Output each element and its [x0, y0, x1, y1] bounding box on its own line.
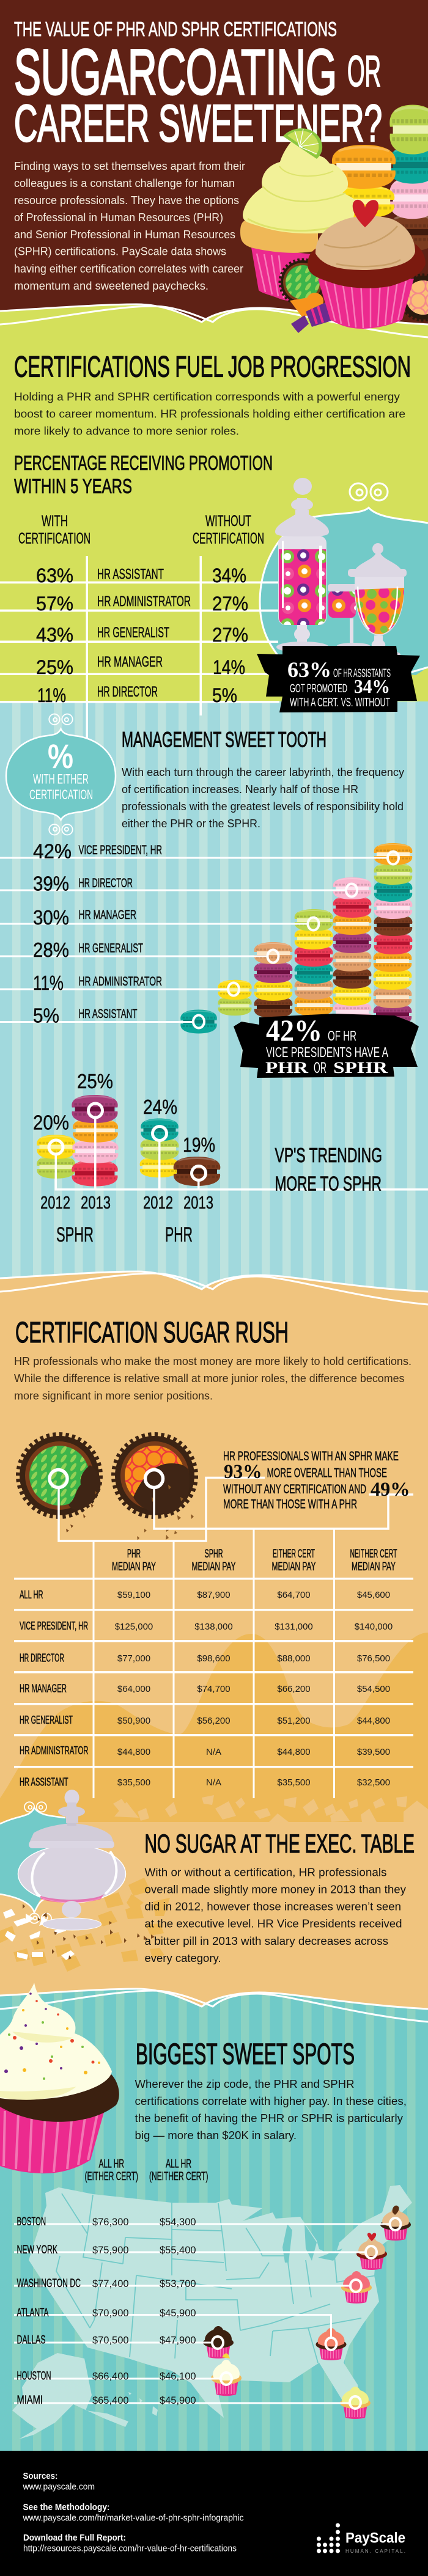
row: manager: [33, 906, 136, 929]
trend axis years: 2012: [143, 1193, 173, 1213]
sugar shards along hill edge: [113, 1795, 428, 1822]
table row: administrator: $44,800: [277, 1747, 311, 1757]
banner: 63 percent callout: GOT PROMOTED: [290, 682, 347, 695]
table row: vice president: $138,000: [194, 1622, 233, 1632]
section background: black footer: [0, 2451, 428, 2576]
connectors from truffles to table: [50, 1470, 413, 1541]
row: HR administrator: 27%: [212, 593, 248, 615]
trend rings: [49, 1103, 205, 1180]
row: director: [33, 873, 133, 895]
table column headers: MEDIAN PAY: [192, 1561, 236, 1573]
illustration: empty candy jar: [18, 1790, 126, 1930]
table grid: promotion rates: [0, 556, 279, 739]
table row: all HR: [20, 1589, 390, 1601]
row: assistant: 5%: [33, 1004, 59, 1026]
column head: without certification: CERTIFICATION: [193, 530, 264, 547]
row: HR director: [37, 684, 237, 706]
row: HR generalist: [36, 624, 248, 646]
table row: director: $77,000: [117, 1653, 150, 1664]
cupcake: Boston: [380, 2206, 411, 2241]
city row: Miami: MIAMI: [17, 2393, 43, 2407]
paragraph: job progression: [14, 391, 405, 437]
column headers: sweet spots: ALL HR: [99, 2158, 124, 2170]
trend values: 25%: [77, 1070, 113, 1092]
heart: [353, 200, 378, 227]
callout: SPHR pay premium: MORE THAN THOSE WITH A PHR: [223, 1497, 357, 1512]
section background: tan sugar rush: [0, 1272, 428, 2011]
cupcake: Washington DC: [341, 2271, 372, 2303]
paragraph: sweet spots: [135, 2078, 407, 2142]
stack SPHR 2012: [37, 1135, 75, 1179]
percent glyph: %: [48, 737, 73, 775]
section background: striped blue management: [0, 701, 428, 1312]
intro paragraph: colleagues is a constant challenge for human: [14, 177, 235, 189]
state lines: [56, 2194, 377, 2363]
truffle green: [281, 260, 325, 304]
row: HR assistant: [36, 565, 246, 587]
row: HR assistant: HR ASSISTANT: [97, 566, 164, 583]
column head: with certification: WITH: [42, 513, 68, 530]
banner: 42 percent callout: OR: [314, 1059, 327, 1077]
banner: 63 percent callout: [257, 646, 420, 712]
column head: with certification: [18, 513, 90, 547]
decorative darker hills behind table: [0, 1633, 428, 1822]
macaron stack: HR assistant: [180, 1010, 217, 1033]
city row: Dallas: $47,900: [160, 2334, 196, 2346]
macaron stack: HR generalist: [254, 942, 292, 1018]
badge: percent with either certification: [6, 714, 116, 835]
paragraph: management: With each turn through the career labyrinth, the frequency: [122, 766, 404, 778]
table row: assistant: $35,500: [117, 1777, 150, 1788]
city row: Washington DC: $77,400: [92, 2278, 128, 2289]
paragraph: exec table: a bitter pill in 2013 with salary decreases across: [144, 1935, 388, 1947]
footer: sources: www.payscale.com: [23, 2482, 95, 2492]
table row: administrator: $39,500: [357, 1747, 390, 1757]
row: vice president: VICE PRESIDENT, HR: [78, 843, 162, 857]
intro paragraph: of Professional in Human Resources (PHR): [14, 211, 223, 224]
paragraph: exec table: overall made slightly more money in 2013 than they: [144, 1883, 406, 1895]
table row: vice president: VICE PRESIDENT, HR: [20, 1620, 88, 1632]
paragraph: sugar rush: more significant in more senior positions.: [14, 1389, 213, 1402]
row: administrator: [33, 971, 162, 994]
row: HR manager: 25%: [36, 656, 73, 678]
cupcake: Houston: [211, 2354, 242, 2396]
row: assistant: [33, 1004, 137, 1026]
badge: percent with either certification: CERTIFICATION: [29, 787, 93, 802]
stack PHR 2013: [174, 1157, 220, 1186]
crumbs: [23, 1904, 155, 1959]
lime slice: [283, 128, 322, 159]
macaron stack: HR director: [333, 877, 371, 1023]
trend values: 20%: [33, 1111, 69, 1134]
table row: manager: $64,000: [117, 1684, 150, 1694]
truffle orange: [401, 276, 428, 320]
title: or: OR: [347, 48, 381, 96]
mini cupcakes on map: [203, 2206, 411, 2419]
intro paragraph: momentum and sweetened paychecks.: [14, 280, 208, 292]
paragraph: exec table: every category.: [144, 1952, 221, 1964]
footer: sources: [23, 2472, 243, 2554]
map rings: [212, 2218, 401, 2409]
column headers: sweet spots: (EITHER CERT): [84, 2170, 138, 2183]
wrapped candy: [290, 293, 331, 333]
row: HR director: 5%: [212, 684, 237, 706]
badge: percent with either certification: WITH EITHER: [33, 771, 89, 787]
trend values: [33, 1070, 215, 1156]
footer: sources: Download the Full Report:: [23, 2533, 126, 2543]
row: HR assistant: 34%: [212, 565, 246, 587]
column headers: sweet spots: (NEITHER CERT): [149, 2170, 208, 2183]
section background: lime job progression: [0, 304, 428, 702]
table column headers: PHR: [127, 1548, 141, 1561]
trend axis years: [40, 1193, 213, 1213]
Hawaii: [128, 2392, 158, 2416]
paragraph: exec table: With or without a certification, HR professionals: [144, 1866, 386, 1878]
paragraph: exec table: [144, 1866, 406, 1964]
city row: Boston: BOSTON: [17, 2215, 46, 2228]
banner: 42 percent callout: OF HR: [328, 1028, 356, 1044]
table column headers: MEDIAN PAY: [352, 1561, 396, 1573]
macaron stack: vice president: [374, 843, 412, 1025]
trend heading: VPs trending more to SPHR: MORE TO SPHR: [275, 1172, 382, 1195]
chocolate cupcake: [308, 200, 426, 329]
banner: 63 percent callout: 34%: [354, 675, 390, 697]
chart lines: share with certification: [0, 857, 387, 1023]
logo: PayScale: HUMAN. CAPITAL.: [345, 2549, 405, 2554]
city row: Washington DC: $53,700: [160, 2278, 196, 2289]
row: assistant: HR ASSISTANT: [78, 1006, 137, 1021]
cupcake: Atlanta: [315, 2328, 346, 2360]
callout: SPHR pay premium: 93%: [224, 1461, 262, 1483]
city row: Boston: $54,300: [160, 2216, 196, 2228]
city row: Atlanta: ATLANTA: [17, 2306, 49, 2319]
table row: vice president: [20, 1620, 393, 1632]
white sugar shards: [3, 1909, 75, 1960]
map of the United States: [12, 2185, 412, 2439]
subheading: percentage receiving promotion: PERCENTAGE RECEIVING PROMOTION: [14, 452, 273, 474]
table row: assistant: [20, 1776, 390, 1788]
table column headers: MEDIAN PAY: [271, 1561, 316, 1573]
great lakes: [282, 2224, 342, 2263]
footer: sources: See the Methodology:: [23, 2503, 110, 2512]
stack SPHR 2013: [72, 1095, 119, 1187]
city row: Atlanta: $70,900: [92, 2307, 128, 2319]
medium jar: [348, 543, 407, 659]
heading: management sweet tooth: MANAGEMENT SWEET TOOTH: [122, 728, 327, 752]
table row: all HR: $59,100: [117, 1590, 150, 1600]
banner: 42 percent callout: PHR: [265, 1059, 308, 1077]
banner: 42 percent callout: [234, 1013, 419, 1078]
row: generalist: HR GENERALIST: [78, 941, 143, 956]
column head: without certification: WITHOUT: [205, 513, 251, 530]
city row: Washington DC: [17, 2277, 196, 2290]
macaron stack middle: [332, 145, 396, 218]
table row: manager: $66,200: [277, 1684, 311, 1694]
illustration: candy jars: [275, 478, 407, 659]
city row: Houston: HOUSTON: [17, 2369, 51, 2383]
paragraph: management: professionals with the greatest levels of responsibility hold: [122, 800, 404, 813]
table column headers: EITHER CERT: [273, 1548, 315, 1561]
table row: generalist: [20, 1714, 390, 1726]
trend values: 24%: [143, 1096, 177, 1118]
column headers: sweet spots: ALL HR: [166, 2158, 191, 2170]
table row: director: $98,600: [197, 1653, 231, 1664]
paragraph: exec table: did in 2012, however those increases weren’t seen: [144, 1900, 401, 1912]
table row: assistant: $35,500: [277, 1777, 311, 1788]
paragraph: job progression: more likely to advance to more senior roles.: [14, 425, 239, 437]
table column headers: SPHR: [204, 1548, 223, 1561]
row: HR administrator: HR ADMINISTRATOR: [97, 593, 191, 610]
row: generalist: [33, 939, 143, 961]
city row: Boston: [17, 2215, 196, 2228]
row: HR manager: HR MANAGER: [97, 654, 163, 670]
section background: teal sweet spots: [0, 1989, 428, 2451]
table row: assistant: N/A: [206, 1777, 221, 1788]
lime cupcake: [240, 128, 356, 301]
trend axis groups: PHR: [165, 1223, 193, 1246]
stack PHR 2012: [140, 1118, 179, 1177]
subheading: percentage receiving promotion: [14, 452, 273, 497]
table row: all HR: ALL HR: [20, 1589, 43, 1601]
macaron stack right: [389, 105, 428, 251]
truffle: green bitten: [20, 1436, 101, 1532]
paragraph: sweet spots: the benefit of having the PHR or SPHR is particularly: [135, 2112, 403, 2124]
city row: Dallas: $70,500: [92, 2334, 128, 2346]
row: HR generalist: 27%: [212, 624, 248, 646]
table row: generalist: $51,200: [277, 1716, 311, 1726]
row: HR generalist: HR GENERALIST: [97, 624, 169, 641]
table row: vice president: $125,000: [115, 1622, 153, 1632]
city row: Houston: $66,400: [92, 2371, 128, 2382]
cupcake: New York: [356, 2233, 387, 2270]
table row: manager: HR MANAGER: [20, 1683, 67, 1695]
cupcake: Miami: [340, 2387, 371, 2419]
paragraph: sweet spots: big — more than $20K in salary.: [135, 2129, 297, 2142]
chart rings: [193, 852, 399, 1028]
cupcake: Dallas: [203, 2326, 234, 2358]
city row: New York: [17, 2243, 196, 2256]
table row: generalist: $44,800: [357, 1716, 390, 1726]
footer: sources: www.payscale.com/hr/market-value-of-phr-sphr-infographic: [23, 2514, 244, 2523]
table row: generalist: HR GENERALIST: [20, 1714, 73, 1726]
table row: generalist: $50,900: [117, 1716, 150, 1726]
macaron stack: HR administrator: [218, 980, 252, 1015]
table row: director: $76,500: [357, 1653, 390, 1664]
row: generalist: 28%: [33, 939, 69, 961]
row: HR manager: [36, 654, 245, 678]
pay table grid: [14, 1529, 413, 1798]
intro paragraph: and Senior Professional in Human Resources: [14, 229, 235, 241]
paragraph: sugar rush: [14, 1355, 411, 1402]
tall jar: [275, 478, 329, 653]
table row: director: $88,000: [277, 1653, 311, 1664]
intro paragraph: Finding ways to set themselves apart from their: [14, 160, 245, 172]
row: HR assistant: 63%: [36, 565, 73, 587]
table row: administrator: HR ADMINISTRATOR: [20, 1744, 88, 1757]
table row: generalist: $56,200: [197, 1716, 231, 1726]
row: HR director: HR DIRECTOR: [97, 684, 158, 700]
banner: 63 percent callout: 63%: [287, 657, 331, 682]
city row: Atlanta: $45,900: [160, 2307, 196, 2319]
paragraph: sugar rush: HR professionals who make the most money are more likely to hold certifications.: [14, 1355, 411, 1367]
city row: Washington DC: WASHINGTON DC: [17, 2277, 81, 2290]
table row: manager: $74,700: [197, 1684, 231, 1694]
macaron stack: HR manager: [295, 909, 333, 1016]
table row: manager: [20, 1683, 390, 1695]
city row: Miami: [17, 2393, 196, 2407]
paragraph: sweet spots: Wherever the zip code, the PHR and SPHR: [135, 2078, 355, 2090]
subheading: percentage receiving promotion: WITHIN 5 YEARS: [14, 475, 132, 497]
trend heading: VPs trending more to SPHR: [275, 1144, 382, 1195]
paragraph: sweet spots: certifications correlate with higher pay. In these cities,: [135, 2095, 407, 2107]
city row: Dallas: DALLAS: [17, 2333, 45, 2346]
city row: Atlanta: [17, 2306, 196, 2319]
table row: administrator: [20, 1744, 390, 1757]
city row: Houston: [17, 2369, 196, 2383]
city row: Boston: $76,300: [92, 2216, 128, 2228]
column head: with certification: CERTIFICATION: [18, 530, 90, 547]
table row: administrator: N/A: [206, 1747, 221, 1757]
table row: assistant: $32,500: [357, 1777, 390, 1788]
intro paragraph: (SPHR) certifications. PayScale data shows: [14, 246, 226, 258]
table row: all HR: $87,900: [197, 1590, 231, 1600]
city row: Houston: $46,100: [160, 2371, 196, 2382]
section background: brown intro: [0, 0, 428, 330]
footer: sources: Sources:: [23, 2472, 57, 2481]
column headers: sweet spots: [84, 2158, 208, 2183]
truffle: orange bitten: [115, 1436, 194, 1540]
column head: without certification: [193, 513, 264, 547]
logo: PayScale: PayScale: [345, 2530, 405, 2547]
paragraph: management: of certification increases. Nearly half of those HR: [122, 783, 358, 796]
title block: [14, 18, 382, 153]
logo: PayScale: [317, 2523, 405, 2554]
spilled sugar shards near empty jar: [0, 1878, 170, 1972]
row: administrator: 11%: [33, 971, 64, 994]
paragraph: job progression: boost to career momentum. HR professionals holding either certification are: [14, 408, 405, 420]
paragraph: sugar rush: While the difference is relative small at more junior roles, the difference becomes: [14, 1372, 405, 1385]
row: HR generalist: 43%: [36, 624, 73, 646]
table row: director: HR DIRECTOR: [20, 1652, 64, 1664]
table column headers: [112, 1548, 397, 1573]
city row: Miami: $45,900: [160, 2395, 196, 2406]
table column headers: MEDIAN PAY: [112, 1561, 156, 1573]
sprinkles: [4, 1992, 100, 2080]
row: vice president: [33, 840, 162, 863]
table row: assistant: HR ASSISTANT: [20, 1776, 68, 1788]
row: director: HR DIRECTOR: [78, 876, 133, 890]
table row: vice president: $131,000: [275, 1622, 313, 1632]
intro paragraph: [14, 160, 245, 292]
trend values: 19%: [183, 1133, 215, 1156]
city row: New York: $55,400: [160, 2244, 196, 2256]
intro paragraph: resource professionals. They have the options: [14, 194, 239, 207]
row: manager: HR MANAGER: [78, 907, 136, 922]
blue ornament blob behind jars: [260, 483, 428, 675]
table row: all HR: $45,600: [357, 1590, 390, 1600]
trend lines: [55, 1118, 428, 1190]
paragraph: management: [122, 766, 404, 830]
paragraph: management: either the PHR or the SPHR.: [122, 818, 260, 830]
small back jar: [328, 584, 370, 649]
row: HR administrator: [36, 593, 248, 615]
trend axis years: 2013: [81, 1193, 111, 1213]
big sprinkle cupcake: [0, 1983, 119, 2173]
row: vice president: 42%: [33, 840, 72, 863]
table row: administrator: $44,800: [117, 1747, 150, 1757]
row: HR administrator: 57%: [36, 593, 73, 615]
table row: director: [20, 1652, 390, 1664]
city row: Miami: $65,400: [92, 2395, 128, 2406]
map leader lines: [14, 2223, 389, 2404]
paragraph: exec table: at the executive level. HR Vice Presidents received: [144, 1917, 402, 1930]
trend axis groups: SPHR: [56, 1223, 94, 1246]
row: manager: 30%: [33, 906, 69, 929]
ornament blob behind jar: [0, 1802, 73, 1923]
trend axis years: 2012: [40, 1193, 70, 1213]
callout: SPHR pay premium: [223, 1449, 410, 1512]
Alaska: [12, 2353, 128, 2439]
logo dots: [317, 2523, 340, 2553]
row: HR director: 11%: [37, 684, 66, 706]
table row: vice president: $140,000: [355, 1622, 393, 1632]
row: HR manager: 14%: [213, 656, 245, 678]
footer: sources: http://resources.payscale.com/hr-value-of-hr-certifications: [23, 2544, 237, 2554]
table row: manager: $54,500: [357, 1684, 390, 1694]
city row: Dallas: [17, 2333, 196, 2346]
row: administrator: HR ADMINISTRATOR: [78, 974, 162, 989]
banner: 42 percent callout: 42%: [266, 1013, 322, 1047]
trend axis groups: [56, 1223, 193, 1246]
trend heading: VPs trending more to SPHR: VP'S TRENDING: [275, 1144, 382, 1166]
row: director: 39%: [33, 873, 69, 895]
trend axis years: 2013: [183, 1193, 213, 1213]
callout: SPHR pay premium: 49%: [371, 1479, 410, 1501]
table row: all HR: $64,700: [277, 1590, 311, 1600]
city row: New York: $75,900: [92, 2244, 128, 2256]
trend chart: SPHR and PHR macarons: [37, 1095, 428, 1190]
paragraph: job progression: Holding a PHR and SPHR certification corresponds with a powerful energy: [14, 391, 400, 403]
banner: 42 percent callout: SPHR: [333, 1059, 388, 1077]
illustration: cupcakes and macarons: [240, 105, 428, 333]
intro paragraph: having either certification correlates with career: [14, 263, 243, 275]
city row: New York: NEW YORK: [17, 2243, 57, 2256]
